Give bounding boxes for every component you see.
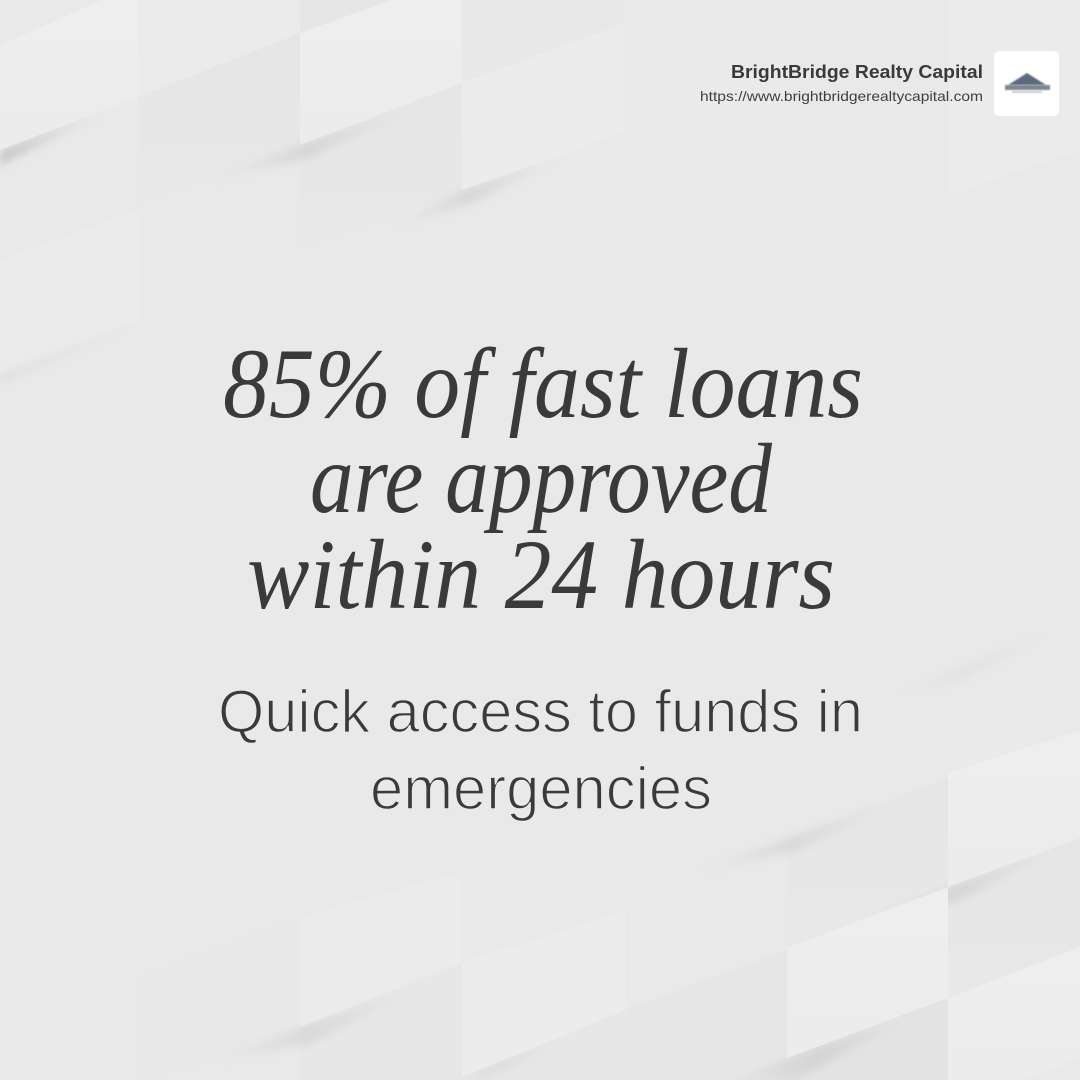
brand url: https://www.brightbridgerealtycapital.com (700, 88, 983, 104)
subheading: Quick access to funds in (218, 678, 863, 745)
headline: within 24 hours (247, 519, 835, 630)
brand name: BrightBridge Realty Capital (731, 61, 983, 82)
subheading: emergencies (370, 755, 712, 822)
headline: are approved (310, 423, 773, 534)
headline (223, 328, 863, 630)
logo tile (994, 51, 1059, 116)
subheading (218, 678, 863, 822)
headline: 85% of fast loans (223, 328, 863, 439)
brand block (700, 51, 1059, 116)
